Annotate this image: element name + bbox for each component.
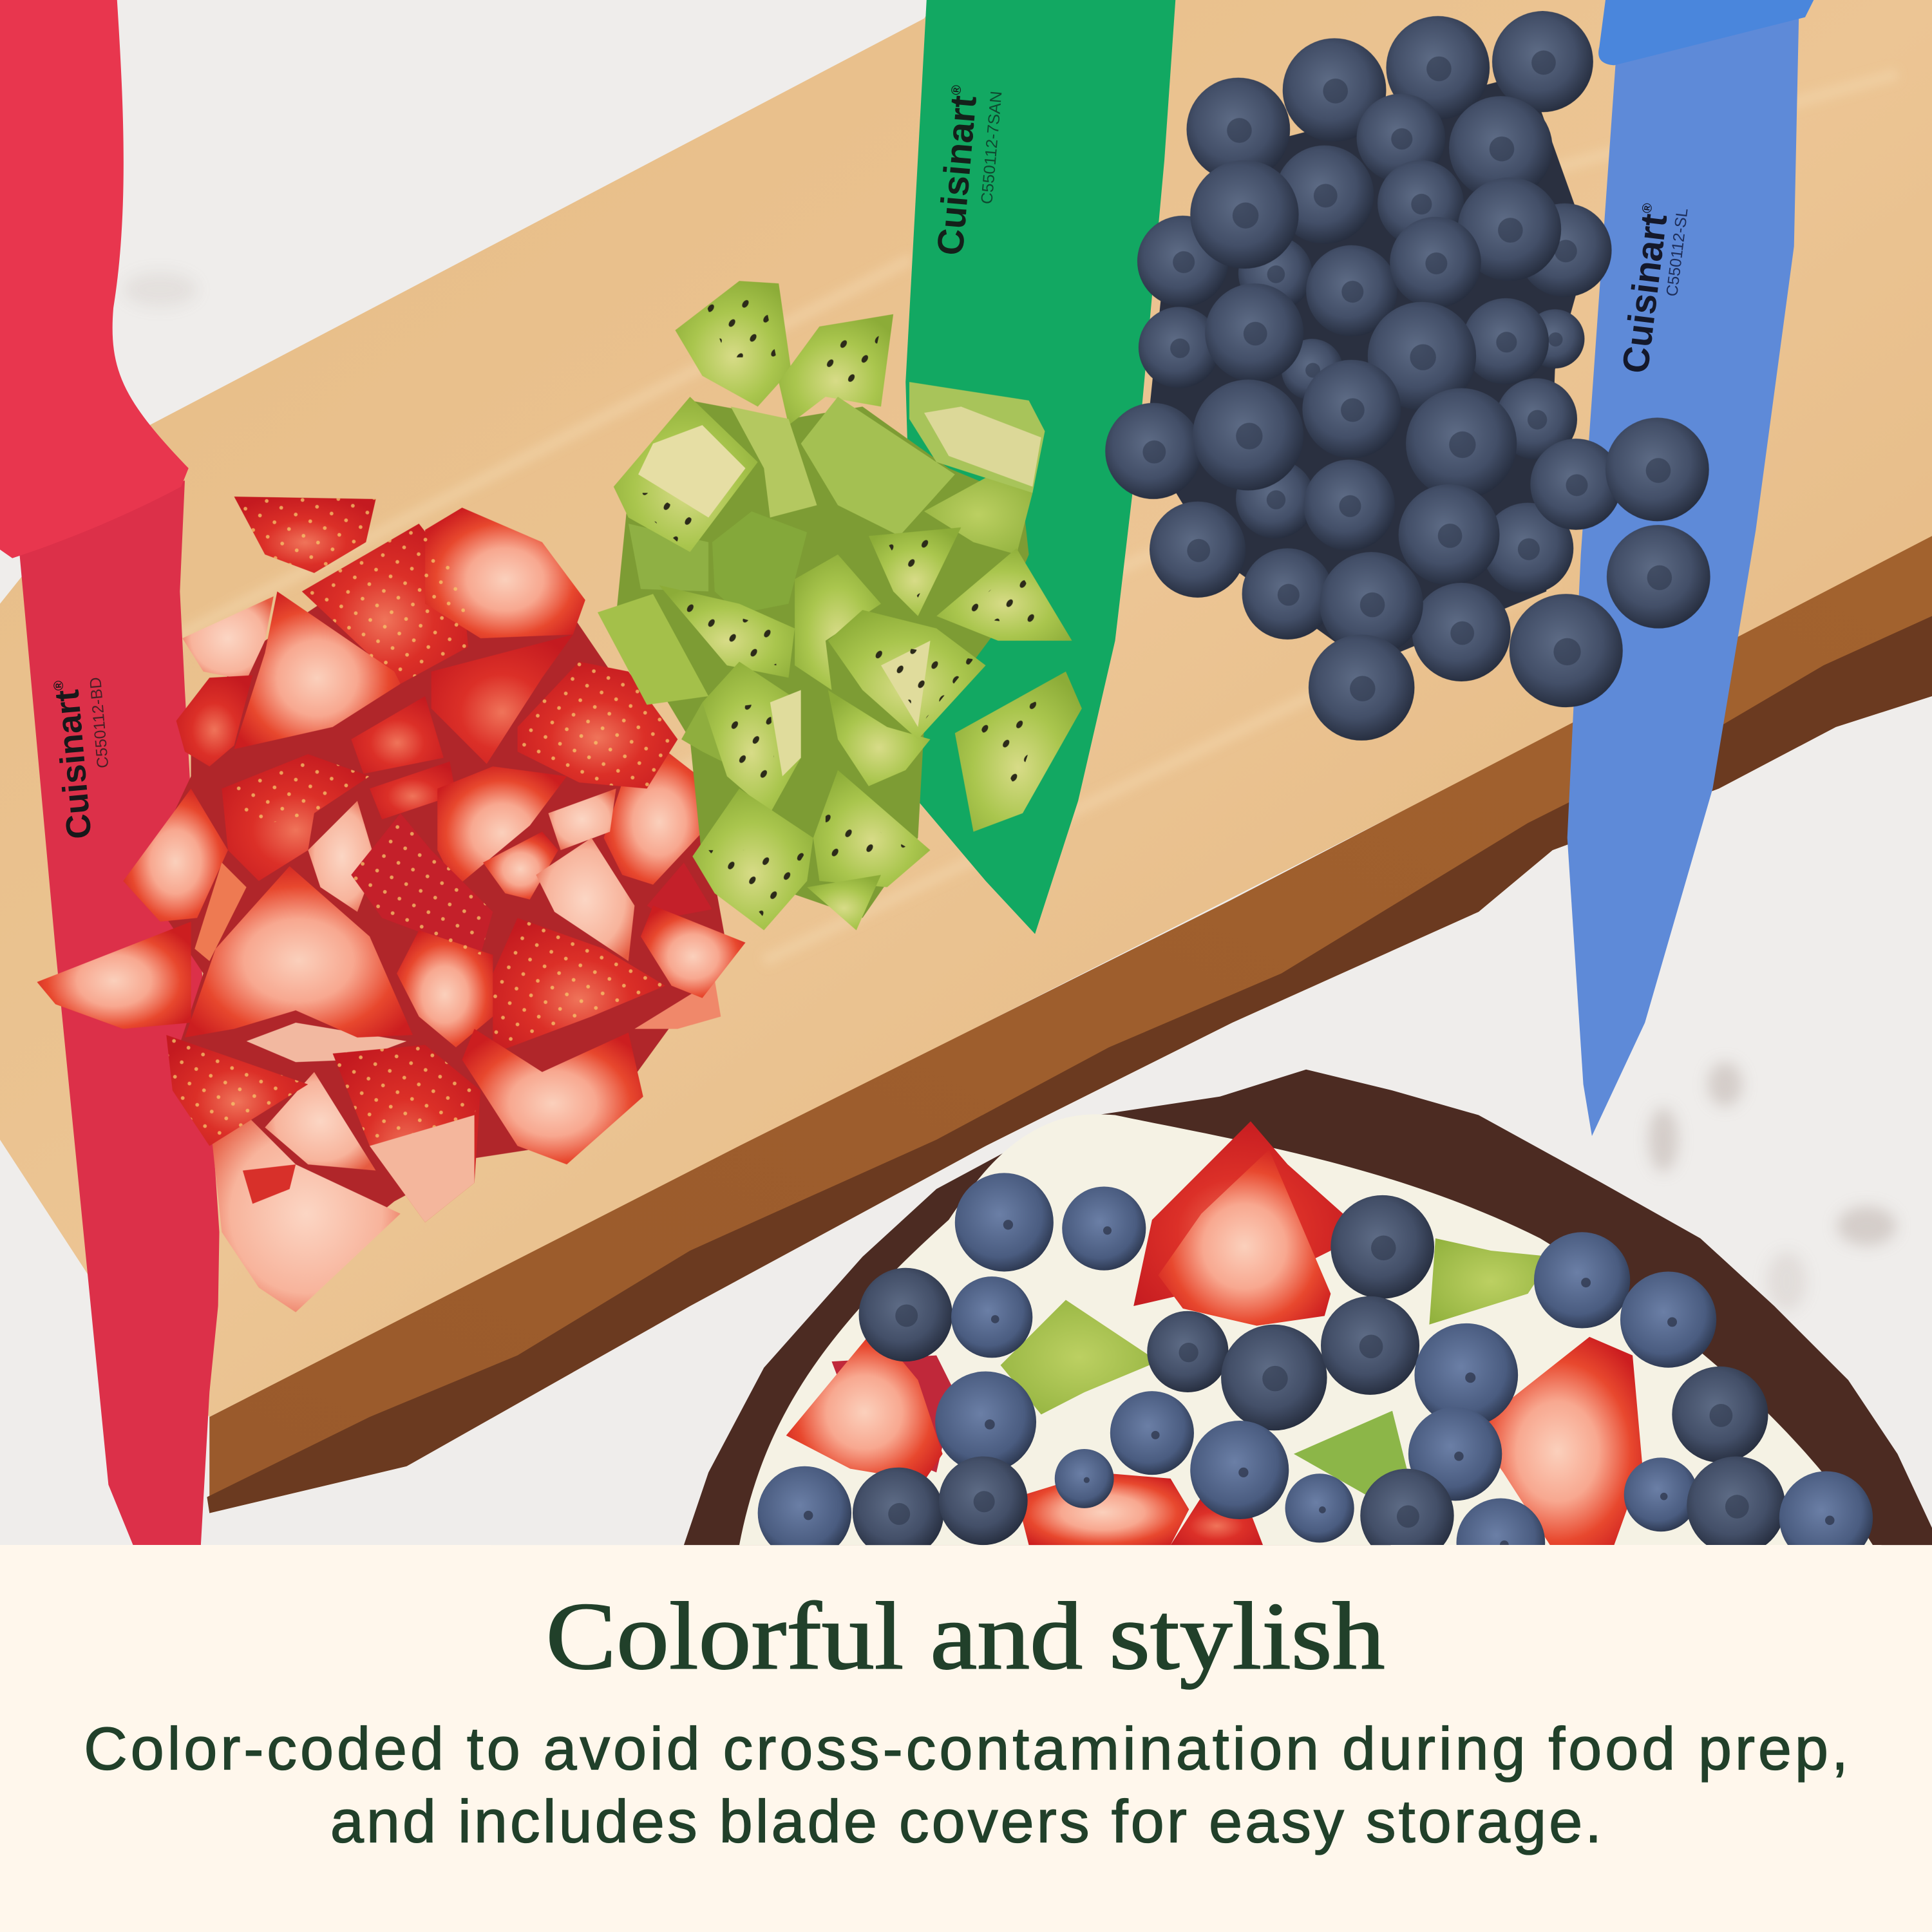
chopped kiwi (598, 281, 1082, 931)
kiwi seeds (622, 296, 1054, 918)
strawberry pile base (142, 542, 727, 1282)
marble veining (123, 272, 1897, 1311)
red blade brand: Cuisinart (48, 688, 99, 840)
red blade (19, 480, 220, 1545)
blue blade brand: Cuisinart (1615, 212, 1675, 375)
blue slicing knife (1567, 0, 1814, 1136)
green santoku knife (905, 0, 1175, 934)
pizza blueberries (758, 1173, 1873, 1587)
blue handle (1598, 0, 1814, 65)
green blade model: C550112-7SAN (978, 90, 1005, 205)
caption panel (0, 1545, 1932, 1932)
strawberry seeds (166, 497, 677, 1146)
green blade brand: Cuisinart (929, 94, 985, 257)
chopped strawberries (37, 497, 746, 1312)
cream topping (739, 1114, 1873, 1545)
blueberry pile base (1146, 74, 1589, 665)
brownie fruit pizza (684, 1070, 1932, 1587)
red handle (0, 0, 189, 558)
pizza kiwi (1001, 1238, 1553, 1496)
body text line 2: and includes blade covers for easy storage. (330, 1787, 1602, 1855)
red bread knife (0, 0, 220, 1545)
cutting board (0, 0, 1932, 1513)
board dark underside (207, 616, 1932, 1513)
blue blade brand: ® (1640, 202, 1656, 214)
heading: Colorful and stylish (546, 1584, 1385, 1690)
brownie crust (684, 1070, 1932, 1545)
board surface (0, 0, 1932, 1417)
red blade model: C550112-BD (86, 676, 112, 769)
kiwi pile base (616, 401, 1029, 918)
green blade brand: ® (949, 84, 965, 96)
body text line 1: Color-coded to avoid cross-contamination during food prep, (84, 1714, 1848, 1782)
green blade (905, 0, 1175, 934)
blueberry pile (1105, 11, 1710, 741)
pizza strawberries (786, 1121, 1642, 1545)
board grain (74, 74, 1897, 961)
marble background (0, 0, 1932, 1545)
red blade brand: ® (51, 679, 66, 691)
caption background (0, 1545, 1932, 1932)
blue blade (1567, 12, 1799, 1136)
board live edge (209, 536, 1932, 1513)
blue blade model: C550112-SL (1663, 207, 1692, 298)
